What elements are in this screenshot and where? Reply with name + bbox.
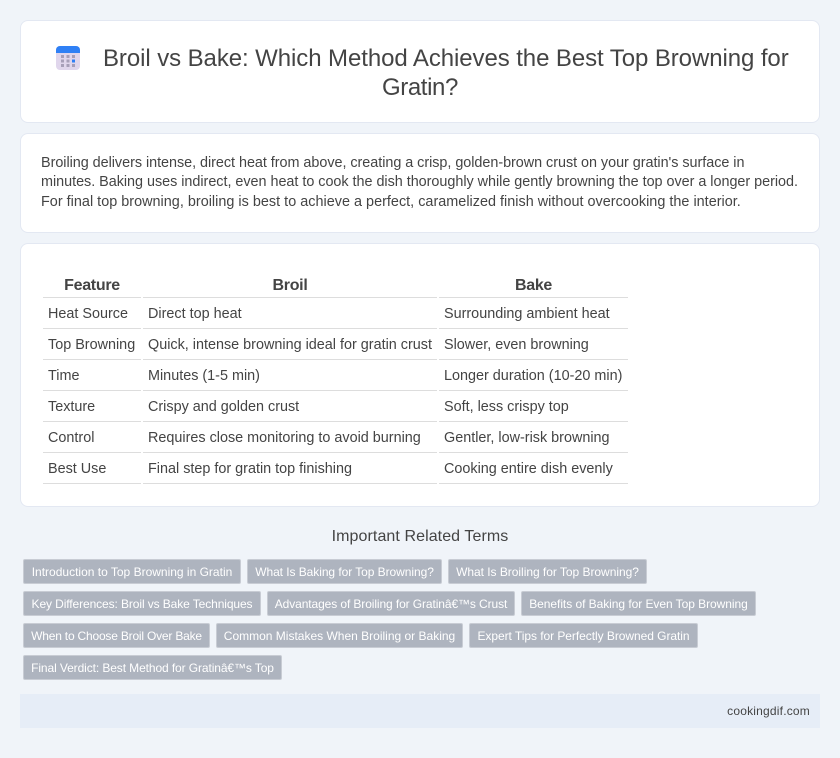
panel: table card bbox=[20, 243, 820, 507]
comparison table: Final step for gratin top finishing bbox=[148, 461, 352, 477]
intro text: For final top browning, broiling is best to achieve a perfect, caramelized finish without overcooking the interior. bbox=[41, 194, 741, 210]
comparison table: Feature bbox=[64, 277, 120, 294]
panel: intro card bbox=[20, 133, 820, 233]
comparison table: Bake bbox=[515, 277, 552, 294]
panel: title card bbox=[20, 20, 820, 123]
related terms tags bbox=[23, 559, 756, 680]
related terms heading: Important Related Terms bbox=[332, 528, 508, 545]
title: Gratin? bbox=[382, 74, 458, 101]
related terms tags: What Is Baking for Top Browning? bbox=[255, 565, 434, 579]
footer bar bbox=[20, 694, 820, 728]
comparison table: Best Use bbox=[48, 461, 106, 477]
related terms tags: When to Choose Broil Over Bake bbox=[31, 629, 202, 643]
comparison table: Surrounding ambient heat bbox=[444, 306, 610, 322]
related terms tags: Expert Tips for Perfectly Browned Gratin bbox=[477, 629, 690, 643]
related terms tags: Benefits of Baking for Even Top Browning bbox=[529, 597, 748, 611]
intro text: Broiling delivers intense, direct heat from above, creating a crisp, golden-brown crust on your gratin's surface in bbox=[41, 155, 744, 171]
icon: calendar bbox=[56, 46, 80, 70]
intro text bbox=[41, 155, 798, 210]
comparison table: Top Browning bbox=[48, 337, 135, 353]
comparison table: Minutes (1-5 min) bbox=[148, 368, 260, 384]
related terms tags: Key Differences: Broil vs Bake Techniques bbox=[32, 597, 252, 611]
related terms tags: Final Verdict: Best Method for Gratinâ€™s Top bbox=[31, 661, 274, 675]
comparison table: Longer duration (10-20 min) bbox=[444, 368, 622, 384]
comparison table: Heat Source bbox=[48, 306, 128, 322]
comparison table: Control bbox=[48, 430, 94, 446]
comparison table: Soft, less crispy top bbox=[444, 399, 569, 415]
comparison table: Quick, intense browning ideal for gratin crust bbox=[148, 337, 432, 353]
comparison table: Texture bbox=[48, 399, 95, 415]
related terms tags: Advantages of Broiling for Gratinâ€™s Crust bbox=[275, 597, 507, 611]
title: Broil vs Bake: Which Method Achieves the Best Top Browning for bbox=[103, 45, 789, 72]
comparison table: Requires close monitoring to avoid burning bbox=[148, 430, 421, 446]
comparison table: Time bbox=[48, 368, 79, 384]
footer bar: cookingdif.com bbox=[727, 704, 810, 718]
comparison table: Direct top heat bbox=[148, 306, 242, 322]
comparison table: Slower, even browning bbox=[444, 337, 589, 353]
related terms tags: What Is Broiling for Top Browning? bbox=[456, 565, 639, 579]
related terms tags: Introduction to Top Browning in Gratin bbox=[32, 565, 232, 579]
comparison table: Cooking entire dish evenly bbox=[444, 461, 613, 477]
intro text: minutes. Baking uses indirect, even heat to cook the dish thoroughly while gently browning the top over a longer period. bbox=[41, 174, 798, 190]
title bbox=[103, 45, 789, 101]
comparison table bbox=[43, 277, 628, 484]
comparison table: Gentler, low-risk browning bbox=[444, 430, 610, 446]
comparison table: Crispy and golden crust bbox=[148, 399, 299, 415]
related terms tags: Common Mistakes When Broiling or Baking bbox=[224, 629, 455, 643]
comparison table: Broil bbox=[273, 277, 307, 294]
